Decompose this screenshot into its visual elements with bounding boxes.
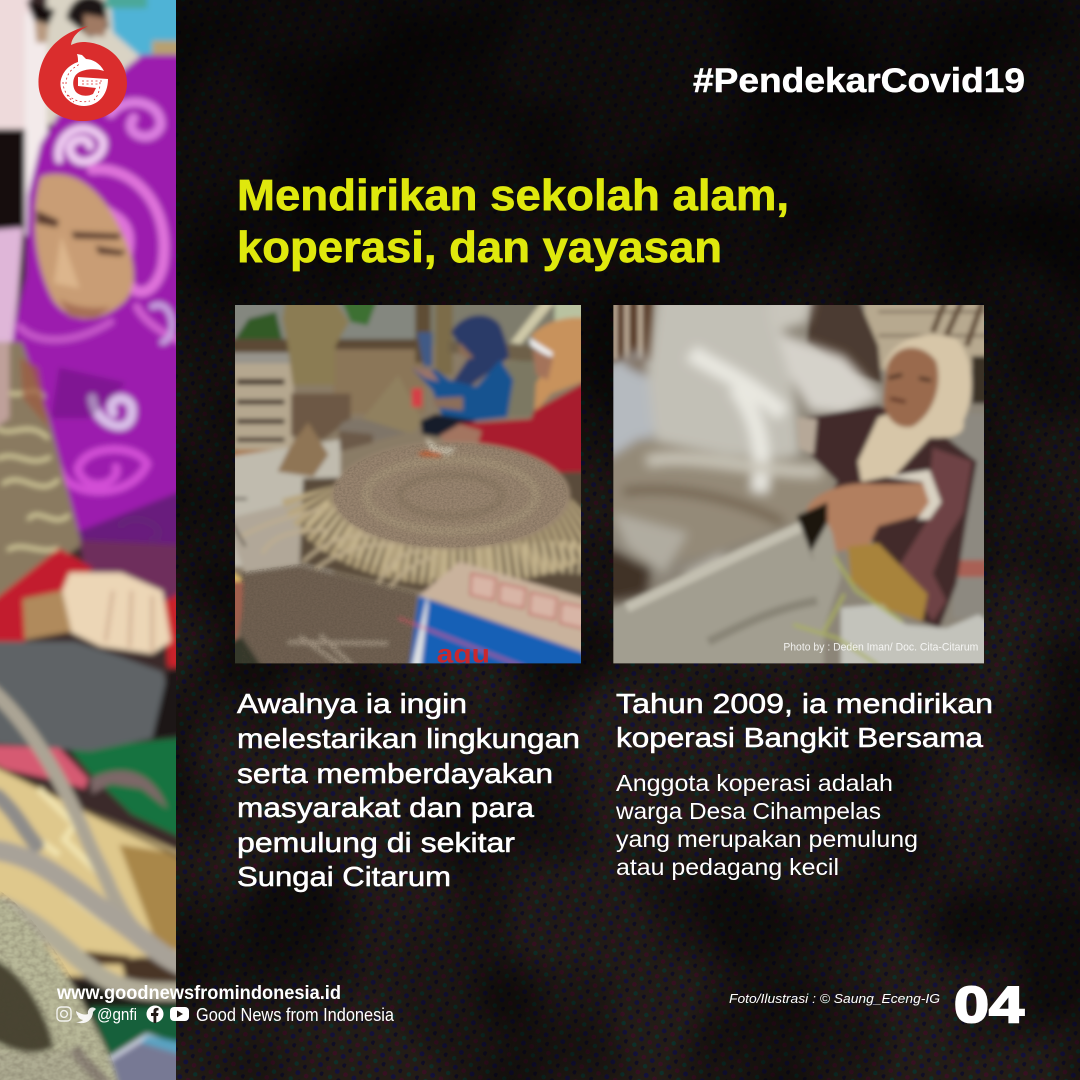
left column text: serta memberdayakan (237, 758, 553, 789)
right column body text (615, 770, 918, 880)
red-clad woman (530, 316, 581, 412)
footer: website and social handles (56, 983, 395, 1025)
bottom dark and green (76, 982, 176, 1023)
woven texture (332, 442, 568, 548)
icon: twitter (76, 1007, 96, 1023)
heading: Mendirikan sekolah alam, (237, 171, 789, 220)
ropes (0, 690, 185, 992)
pink sleeve (0, 227, 23, 342)
page number: 04 (954, 976, 1025, 1033)
floor (225, 439, 340, 567)
mauve cloth (79, 538, 176, 602)
box lettering: aqu (437, 638, 490, 668)
photo caption: Foto/Ilustrasi : © Saung_Eceng-IG (729, 991, 940, 1006)
icon: youtube (170, 1007, 189, 1021)
skirt (848, 543, 928, 621)
hashtag: #PendekarCovid19 (693, 62, 1025, 100)
right column heading: koperasi Bangkit Bersama (616, 722, 983, 753)
scarf (858, 335, 972, 482)
hand (23, 573, 171, 654)
photo: woman sorting plastic waste (613, 305, 984, 664)
right column body text: Anggota koperasi adalah (616, 770, 893, 796)
knit texture (0, 892, 118, 1080)
photo: women weaving water-hyacinth mats (235, 305, 581, 664)
red cuff (0, 548, 93, 642)
hijab (11, 55, 185, 560)
woman: blouse (807, 405, 977, 628)
cone baskets (372, 380, 414, 412)
walls and beams (235, 305, 581, 415)
dark and green band (70, 734, 176, 756)
left column text: melestarikan lingkungan (237, 723, 580, 754)
face (883, 348, 938, 427)
heading: koperasi, dan yayasan (237, 223, 722, 272)
brown patterned garment (0, 342, 82, 621)
front sack (603, 514, 841, 672)
right column body text: yang merupakan pemulung (616, 826, 918, 852)
right column body text: atau pedagang kecil (616, 854, 839, 880)
left column text: Sungai Citarum (237, 861, 451, 892)
icon: instagram (57, 1007, 71, 1021)
logo: GNFI red badge (38, 26, 127, 121)
knitted bag (0, 890, 121, 1080)
green stems (793, 557, 902, 665)
photo credit: Photo by : Deden Iman/ Doc. Cita-Citarum (783, 641, 978, 653)
crate (225, 353, 294, 457)
cardboard box (417, 562, 592, 655)
mat (0, 763, 185, 977)
big woven mat (332, 442, 570, 549)
footer: website and social handles: @gnfi (97, 1005, 137, 1024)
bottom mat (238, 565, 419, 672)
left column text: Awalnya ia ingin (237, 688, 467, 719)
right column body text: warga Desa Cihampelas (615, 798, 881, 824)
icon: facebook (146, 1006, 164, 1023)
blue-clad woman (449, 315, 509, 387)
background crowd and wall (0, 0, 183, 236)
plastic sheets (603, 295, 882, 601)
face (35, 174, 134, 319)
grey lap (0, 642, 171, 751)
left column text: pemulung di sekitar (237, 827, 515, 858)
sack bottom right (841, 604, 994, 672)
fringe (235, 501, 335, 576)
footer: website and social handles: www.goodnewsfromindonesia.id (56, 983, 341, 1004)
left column text: masyarakat dan para (237, 792, 534, 823)
left edge skin (235, 570, 244, 585)
stacked basket and stump (283, 298, 349, 385)
right column heading: Tahun 2009, ia mendirikan (616, 688, 993, 719)
icon: eagle G mark (60, 54, 108, 106)
footer: website and social handles: Good News from Indonesia (196, 1005, 395, 1025)
right column heading (616, 688, 993, 753)
left column text (237, 688, 580, 892)
arm and cuff (807, 483, 929, 553)
photo: woman in purple hijab (left strip) (0, 0, 176, 1080)
bamboo wall (614, 305, 984, 406)
grey sacks right (956, 442, 980, 591)
heading (237, 171, 789, 272)
